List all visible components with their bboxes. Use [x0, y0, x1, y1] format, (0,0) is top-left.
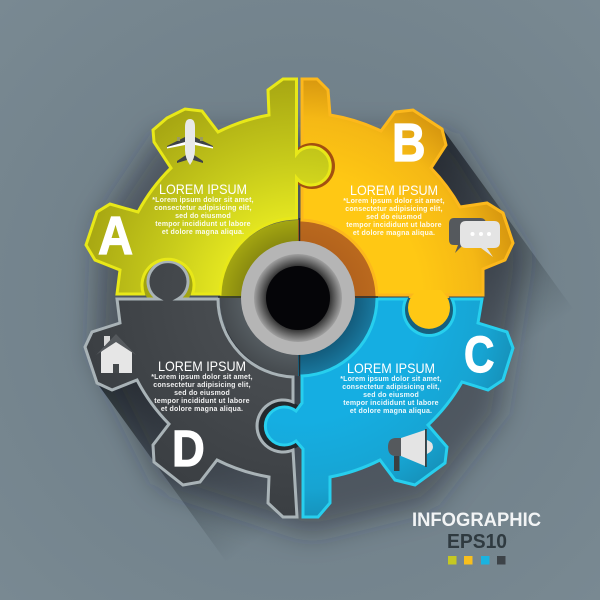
C icon: megaphone — [388, 429, 433, 471]
C body text: tempor incididunt ut labore — [343, 400, 439, 407]
C body text: consectetur adipisicing elit, — [342, 384, 440, 391]
B heading: LOREM IPSUM — [350, 182, 438, 198]
B connector tab — [408, 290, 450, 329]
D heading: LOREM IPSUM — [158, 358, 246, 374]
C letter: C — [464, 326, 494, 383]
long shadow — [95, 128, 600, 600]
A body text: tempor incididunt ut labore — [155, 221, 251, 228]
center dividers — [218, 218, 378, 376]
olive socket behind D tab — [143, 259, 193, 309]
B letter: B — [392, 112, 426, 173]
B icon: chat bubbles — [449, 218, 500, 257]
C inner quarter — [298, 298, 376, 376]
D gear piece — [85, 262, 297, 517]
A letter: A — [98, 205, 133, 266]
B body text: tempor incididunt ut labore — [346, 222, 442, 229]
A body text: consectetur adipisicing elit, — [154, 205, 252, 212]
B body text: et dolore magna aliqua. — [353, 230, 435, 237]
D letter: D — [172, 420, 205, 478]
A body text: sed do eiusmod — [175, 213, 231, 220]
panel: B — [298, 79, 513, 328]
A icon: airplane — [167, 119, 213, 165]
D body text: consectetur adipisicing elit, — [153, 382, 251, 389]
C gear piece — [265, 299, 513, 517]
subtitle: EPS10: EPS10 — [447, 531, 507, 553]
B body text: *Lorem ipsum dolor sit amet, — [343, 198, 445, 205]
panel: C — [265, 298, 513, 517]
center hub — [241, 241, 355, 355]
C body text: et dolore magna aliqua. — [350, 408, 432, 415]
C body text: *Lorem ipsum dolor sit amet, — [340, 376, 442, 383]
D body text: et dolore magna aliqua. — [161, 406, 243, 413]
panel: A — [86, 79, 335, 298]
B body text: consectetur adipisicing elit, — [345, 206, 443, 213]
D body text: *Lorem ipsum dolor sit amet, — [151, 374, 253, 381]
C heading: LOREM IPSUM — [347, 360, 435, 376]
B inner quarter — [298, 220, 376, 298]
tab socket ring — [289, 143, 335, 189]
C body text: sed do eiusmod — [363, 392, 419, 399]
A inner quarter — [220, 220, 298, 298]
title: infographic: INFOGRAPHIC — [412, 510, 541, 531]
D body text: tempor incididunt ut labore — [154, 398, 250, 405]
dark socket behind B tab — [404, 298, 454, 335]
D body text: sed do eiusmod — [174, 390, 230, 397]
A gear piece — [86, 79, 330, 294]
B body text: sed do eiusmod — [366, 214, 422, 221]
A body text: et dolore magna aliqua. — [162, 229, 244, 236]
D inner quarter — [220, 298, 298, 376]
A body text: *Lorem ipsum dolor sit amet, — [152, 197, 254, 204]
panel: D — [85, 262, 298, 517]
legend swatches — [448, 556, 506, 564]
A heading: LOREM IPSUM — [159, 181, 247, 197]
dark socket behind C tab — [259, 401, 309, 451]
B gear piece — [302, 79, 513, 328]
D icon: house — [96, 334, 136, 373]
